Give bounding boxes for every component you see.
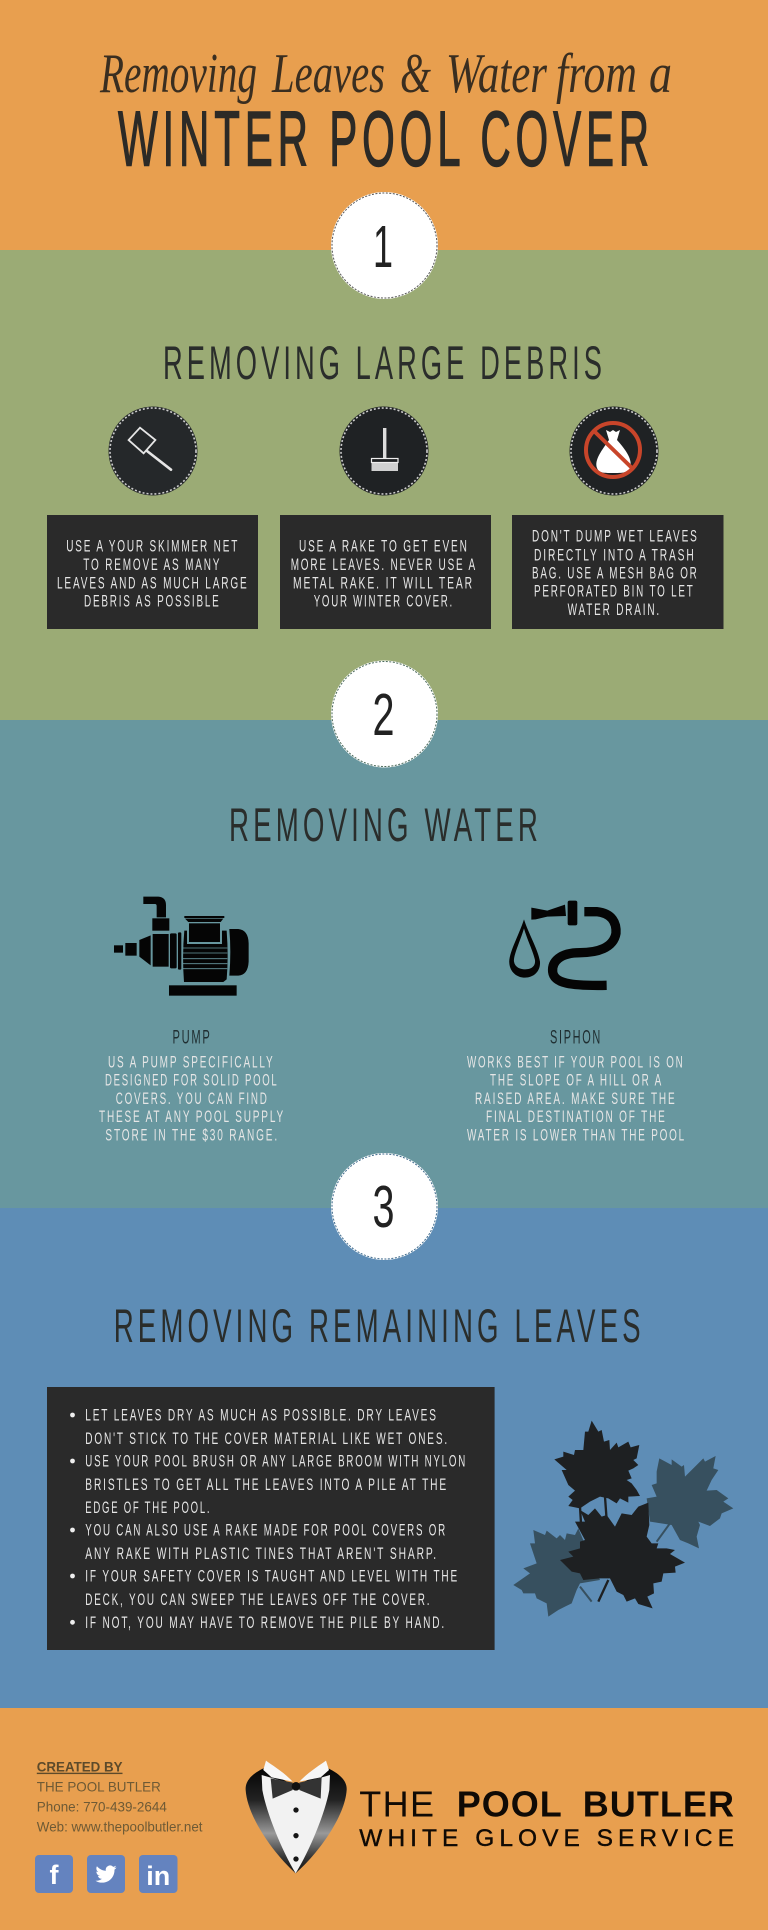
text box: leaf tips: BRISTLES TO GET ALL THE LEAVES INTO A PILE AT THE (85, 1476, 448, 1494)
title: Removing (99, 43, 257, 105)
text block: pump: THESE AT ANY POOL SUPPLY (99, 1108, 285, 1126)
icon: twitter (87, 1855, 125, 1893)
text box: skimmer net: TO REMOVE AS MANY (83, 556, 221, 574)
text box: wet leaves (512, 515, 724, 629)
number badge 2: 2 (372, 682, 394, 748)
panel: header background (0, 0, 768, 250)
text box: rake: YOUR WINTER COVER. (314, 592, 454, 610)
text block: pump: COVERS. YOU CAN FIND (116, 1090, 269, 1108)
text box: leaf tips: IF YOUR SAFETY COVER IS TAUGHT AND LEVEL WITH THE (85, 1568, 459, 1586)
panel: section 2 background (0, 720, 768, 1208)
icon: skimmer net (108, 406, 198, 496)
icon: siphon hose (509, 901, 616, 985)
title: Leaves (271, 43, 385, 105)
text box: wet leaves: WATER DRAIN. (568, 601, 661, 619)
contact details: Phone: 770-439-2644 (37, 1799, 167, 1815)
panel: footer background (0, 1708, 768, 1930)
text box: skimmer net (47, 515, 258, 629)
icon: linkedin (139, 1855, 178, 1893)
text box: rake (280, 515, 491, 629)
logo text: the pool butler: POOL (457, 1784, 562, 1825)
text box: leaf tips: EDGE OF THE POOL. (85, 1499, 211, 1517)
number badge 1 (331, 192, 438, 299)
title: a (649, 43, 672, 105)
contact details: Web: www.thepoolbutler.net (37, 1819, 203, 1835)
contact details (37, 1759, 203, 1835)
text box: leaf tips: USE YOUR POOL BRUSH OR ANY LARGE BROOM WITH NYLON (85, 1453, 467, 1471)
logo text: the pool butler (359, 1784, 734, 1852)
icon: no trash bag (570, 406, 658, 496)
text block: pump: STORE IN THE $30 RANGE. (105, 1126, 279, 1144)
number badge 3 (331, 1153, 438, 1260)
text box: leaf tips: DECK, YOU CAN SWEEP THE LEAVES OFF THE COVER. (85, 1591, 431, 1609)
logo text: the pool butler: THE (359, 1784, 434, 1825)
text box: leaf tips: LET LEAVES DRY AS MUCH AS POSSIBLE. DRY LEAVES (85, 1407, 438, 1425)
text box: leaf tips: ANY RAKE WITH PLASTIC TINES THAT AREN'T SHARP. (85, 1545, 438, 1563)
text block: pump: US A PUMP SPECIFICALLY (108, 1053, 274, 1071)
text block: pump: PUMP (172, 1026, 212, 1048)
panel: section 1 background (0, 250, 768, 720)
icon: pump (114, 897, 249, 996)
icon: rake (340, 406, 428, 496)
text box: rake: METAL RAKE. IT WILL TEAR (293, 574, 474, 592)
heading: removing water: REMOVING WATER (229, 798, 542, 851)
text box: rake: MORE LEAVES. NEVER USE A (291, 556, 477, 574)
number badge 1: 1 (373, 214, 393, 280)
text box: leaf tips: IF NOT, YOU MAY HAVE TO REMOVE THE PILE BY HAND. (85, 1614, 446, 1632)
logo: tuxedo (246, 1761, 347, 1873)
text block: siphon: SIPHON (550, 1026, 602, 1048)
logo text: the pool butler: WHITE GLOVE SERVICE (359, 1825, 734, 1852)
icon: linkedin: in (146, 1861, 170, 1891)
text block: pump (99, 1026, 285, 1144)
title: from (556, 43, 637, 105)
contact details: CREATED BY (37, 1759, 123, 1775)
number badge 2 (331, 660, 438, 768)
contact details: THE POOL BUTLER (37, 1779, 161, 1795)
text block: siphon (467, 1026, 686, 1144)
text box: leaf tips (47, 1387, 495, 1650)
text box: skimmer net: DEBRIS AS POSSIBLE (84, 592, 221, 610)
logo text: the pool butler: BUTLER (583, 1784, 734, 1825)
icon: maple leaves (513, 1421, 733, 1617)
panel: section 3 background (0, 1208, 768, 1708)
text box: leaf tips: DON'T STICK TO THE COVER MATERIAL LIKE WET ONES. (85, 1430, 449, 1448)
text box: leaf tips: YOU CAN ALSO USE A RAKE MADE FOR POOL COVERS OR (85, 1522, 447, 1540)
text box: rake: USE A RAKE TO GET EVEN (299, 538, 469, 556)
number badge 3: 3 (372, 1174, 394, 1240)
icon: facebook (35, 1855, 73, 1893)
title (99, 43, 672, 182)
text block: pump: DESIGNED FOR SOLID POOL (105, 1072, 278, 1090)
text box: skimmer net: LEAVES AND AS MUCH LARGE (57, 574, 249, 592)
title: & (400, 43, 431, 105)
title: Water (446, 43, 547, 105)
icon: facebook: f (50, 1860, 60, 1890)
text box: skimmer net: USE A YOUR SKIMMER NET (66, 538, 239, 556)
